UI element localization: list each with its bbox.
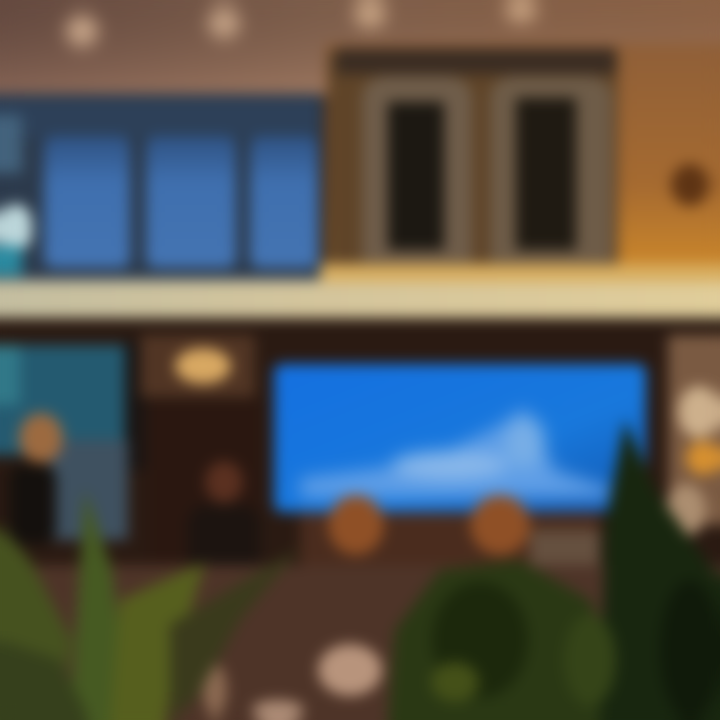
blue screen [274, 364, 646, 512]
panel: lower left teal window [0, 340, 145, 540]
person centre [188, 461, 260, 575]
door left [362, 76, 472, 262]
cream balcony band [0, 264, 720, 318]
ceiling with lights [0, 0, 720, 96]
orange chairs [300, 495, 600, 568]
person left [10, 413, 63, 544]
ceiling lamp [140, 335, 260, 560]
panel: lower level dark wall [0, 322, 720, 572]
panel: wooden wall with double doors [326, 44, 720, 279]
door right [490, 76, 612, 262]
floor [0, 565, 720, 720]
window 3 [250, 136, 318, 268]
window 1 [44, 136, 130, 268]
plant: right foreground foliage [388, 420, 720, 720]
panel: upper left blue windows [0, 94, 322, 284]
right side lit panel [666, 335, 720, 536]
window 2 [146, 136, 236, 268]
cloud pattern on screen [300, 408, 610, 498]
plant: left foreground palm [0, 490, 300, 720]
wall lamp spot [671, 164, 709, 206]
